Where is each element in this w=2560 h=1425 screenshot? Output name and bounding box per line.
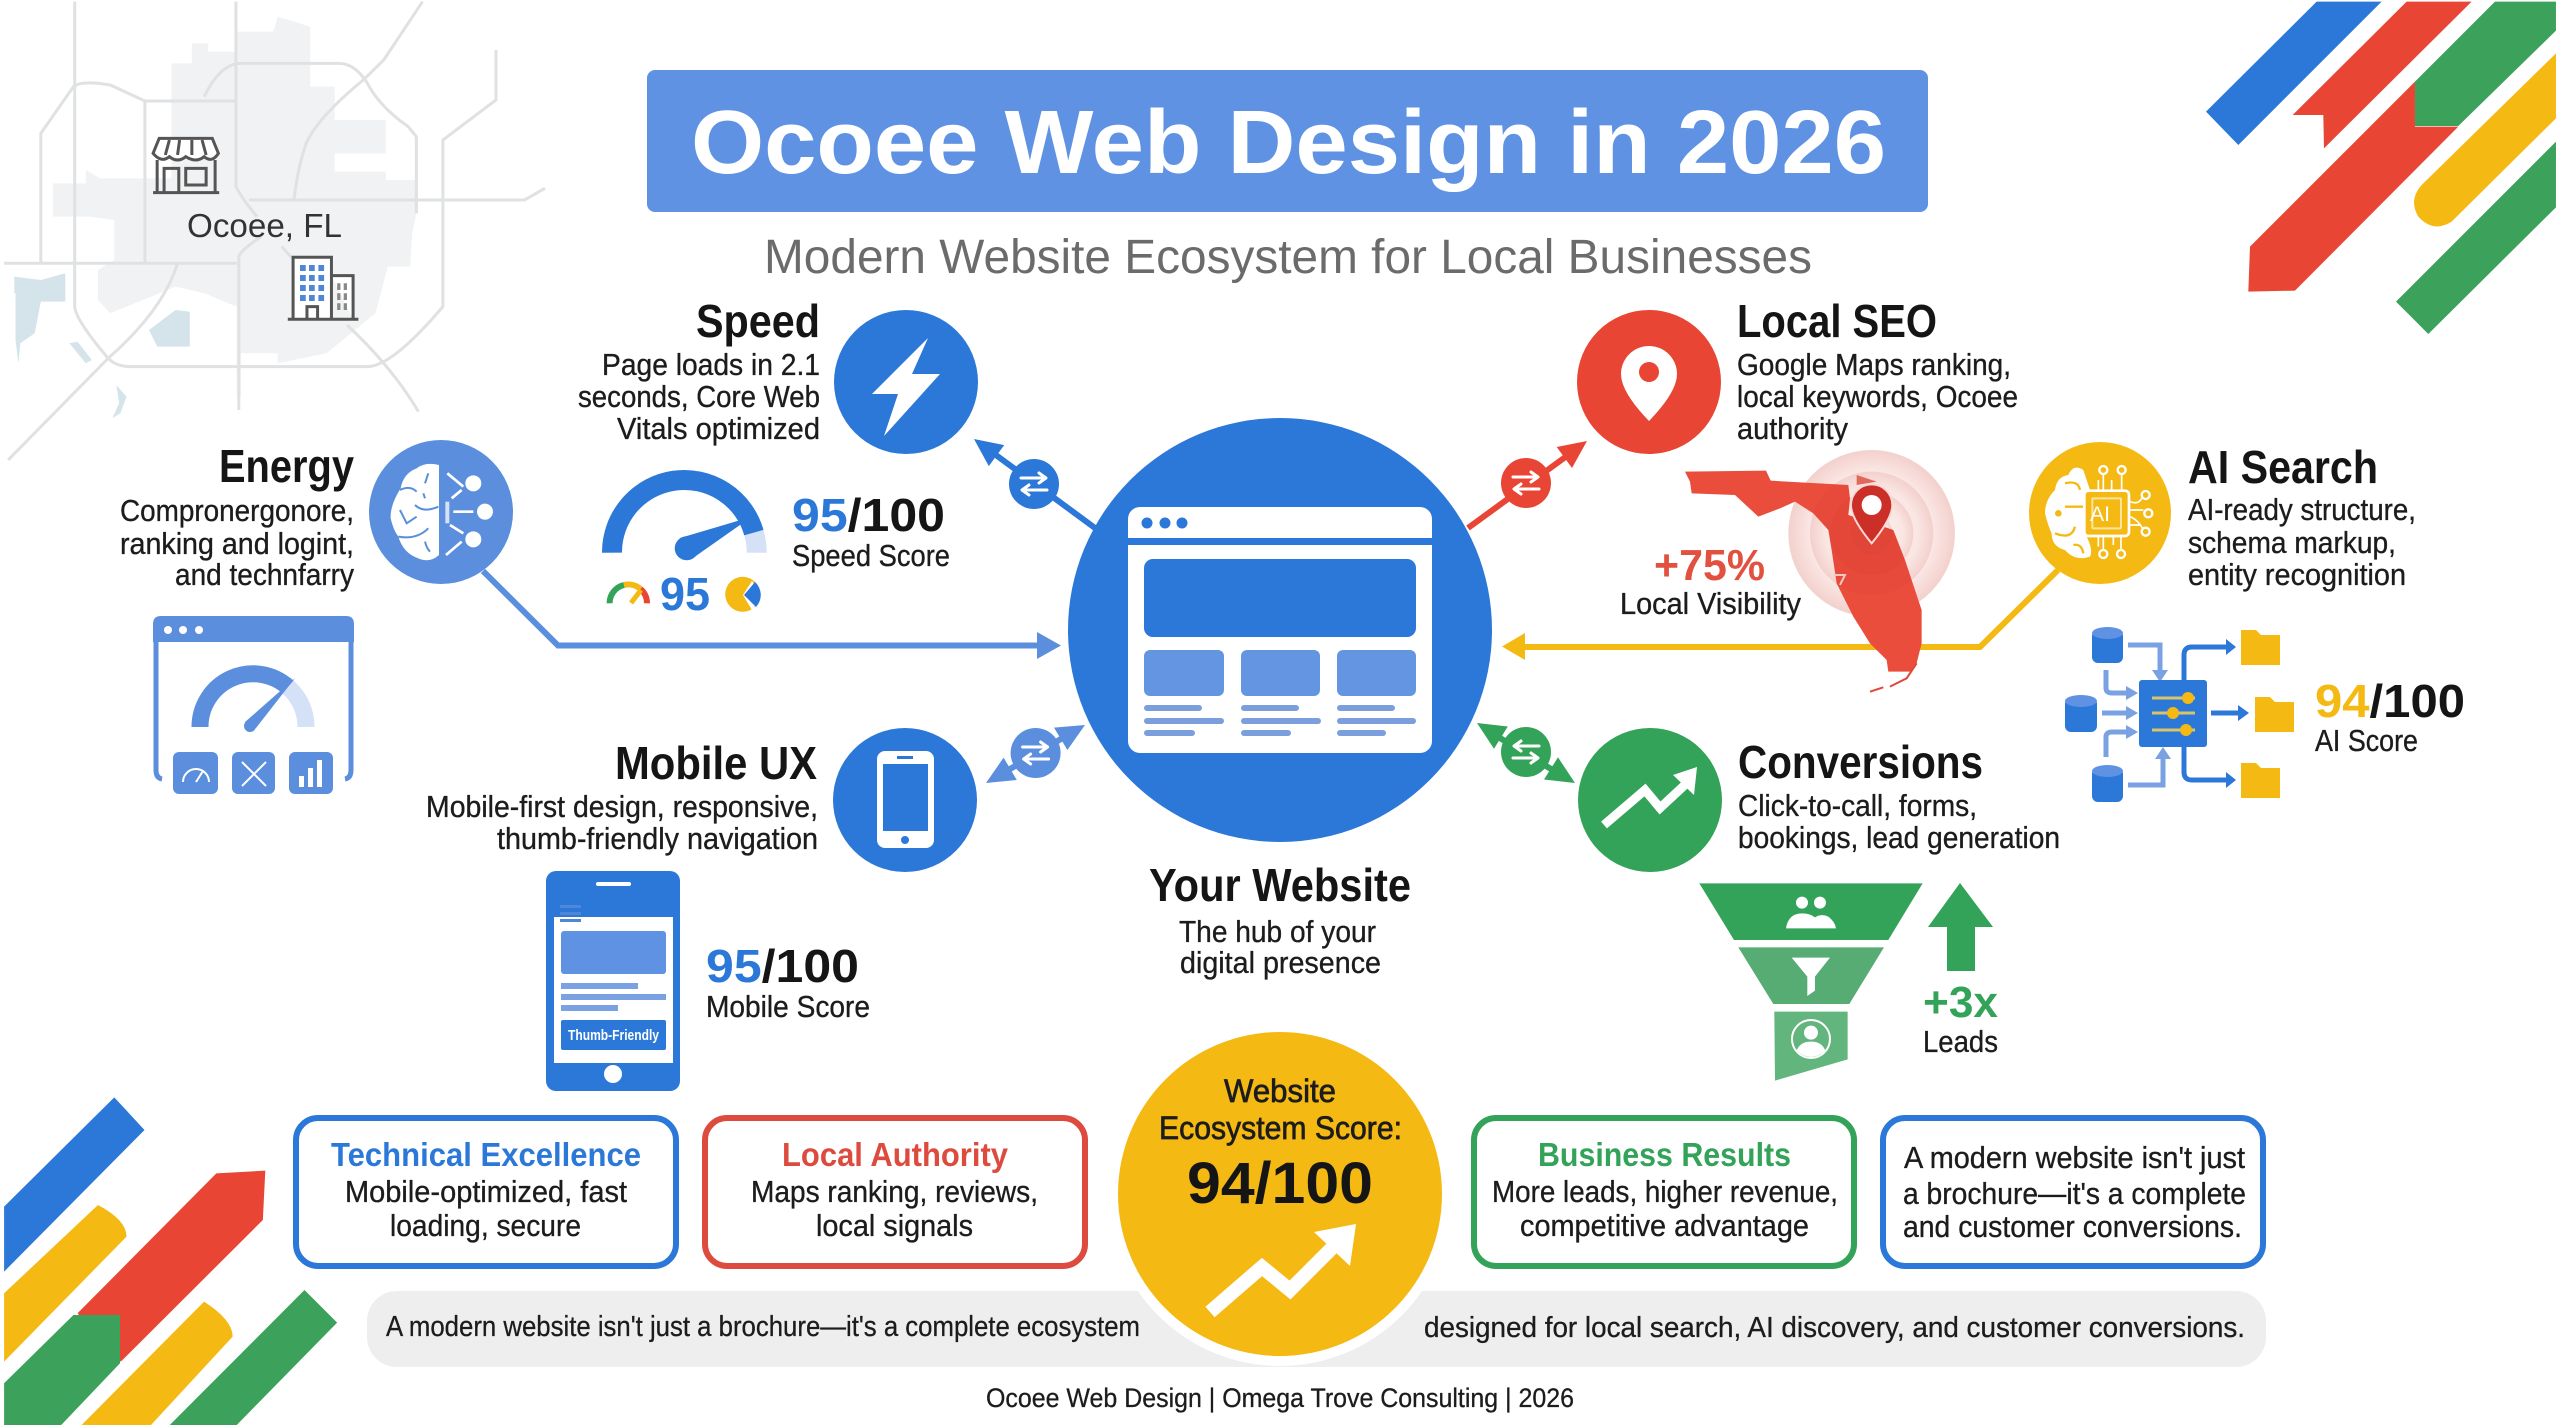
summary strip: A modern website isn't just a brochure—it's a complete ecosystem xyxy=(386,1311,1140,1343)
website ecosystem score badge: Website xyxy=(1224,1073,1336,1109)
conversion funnel xyxy=(1699,883,1923,1081)
energy text: and technfarry xyxy=(175,557,354,592)
speed text: seconds, Core Web xyxy=(578,379,820,414)
icon: AI brain chip: AI xyxy=(2090,503,2110,526)
panel: closing note: A modern website isn't just xyxy=(1904,1140,2245,1175)
summary strip xyxy=(367,1291,2266,1367)
speed gauge: 95 xyxy=(660,568,710,620)
icon: storefront xyxy=(153,138,219,193)
AI search text: AI-ready structure, xyxy=(2188,492,2416,527)
icon: mobile phone xyxy=(833,728,977,872)
icon: energy brain network xyxy=(369,440,513,584)
panel: business results xyxy=(1474,1118,1854,1266)
leads stat xyxy=(1923,883,1999,1059)
icon: browser window xyxy=(1128,507,1432,753)
hub caption: digital presence xyxy=(1180,945,1381,980)
speed score: Speed Score xyxy=(792,538,950,573)
panel: local authority: Local Authority xyxy=(782,1136,1009,1173)
speed score xyxy=(792,489,950,573)
connector: mobile UX xyxy=(986,725,1085,783)
map of Ocoee, FL xyxy=(4,2,545,460)
footer credit: Ocoee Web Design | Omega Trove Consulting | 2026 xyxy=(986,1383,1574,1413)
connector: speed xyxy=(974,439,1095,528)
title banner: Ocoee Web Design in 2026 xyxy=(691,93,1886,193)
leads stat: +3x xyxy=(1923,978,1999,1027)
speed score: 95/100 xyxy=(792,489,945,541)
AI data flow diagram xyxy=(2065,627,2294,802)
local SEO text xyxy=(1737,295,2018,446)
icon: AI brain chip xyxy=(2029,442,2171,584)
icon: score trend arrow xyxy=(1210,1224,1356,1312)
icon: mini gauge xyxy=(610,584,647,603)
energy text: Energy xyxy=(219,440,354,492)
hub caption xyxy=(1149,859,1411,980)
connector: conversions xyxy=(1477,723,1575,783)
mobile score: Mobile Score xyxy=(706,989,870,1024)
AI search text xyxy=(2188,441,2416,592)
panel: technical excellence: Mobile-optimized, fast xyxy=(345,1174,627,1209)
AI score: AI Score xyxy=(2315,723,2418,758)
mobile score: 95/100 xyxy=(706,940,859,992)
energy text: Compronergonore, xyxy=(120,493,354,528)
icon: filter xyxy=(1792,958,1830,996)
leads stat: Leads xyxy=(1923,1024,1998,1059)
connector: local SEO xyxy=(1468,441,1587,528)
Florida map with location pin xyxy=(1685,450,1955,692)
hub: your website circle xyxy=(1068,418,1492,842)
hub caption: The hub of your xyxy=(1179,914,1376,949)
icon: people xyxy=(1786,897,1836,928)
summary strip: designed for local search, AI discovery, and customer conversions. xyxy=(1424,1312,2245,1344)
panel: business results: Business Results xyxy=(1538,1136,1791,1173)
mobile UX text xyxy=(426,737,818,856)
local SEO text: local keywords, Ocoee xyxy=(1737,379,2018,414)
local SEO text: authority xyxy=(1737,411,1848,446)
website ecosystem score badge xyxy=(1108,1022,1452,1366)
panel: closing note: and customer conversions. xyxy=(1903,1209,2242,1244)
panel: technical excellence: loading, secure xyxy=(390,1208,581,1243)
conversions text xyxy=(1738,736,2060,855)
panel: local authority xyxy=(705,1118,1085,1266)
thumb-friendly phone illustration: Thumb-Friendly xyxy=(568,1027,660,1044)
panel: local authority: Maps ranking, reviews, xyxy=(751,1174,1038,1209)
panel: closing note xyxy=(1883,1118,2263,1266)
conversions text: Conversions xyxy=(1738,736,1983,788)
title banner xyxy=(647,70,1928,212)
panel: technical excellence: Technical Excellence xyxy=(331,1136,641,1173)
AI search text: entity recognition xyxy=(2188,557,2406,592)
speed gauge xyxy=(610,480,762,620)
icon: office building xyxy=(288,257,358,319)
icon: local SEO pin xyxy=(1577,310,1721,454)
speed text: Vitals optimized xyxy=(617,411,820,446)
thumb-friendly phone illustration xyxy=(546,871,680,1091)
mobile UX text: Mobile-first design, responsive, xyxy=(426,789,818,824)
arrow: AI search to hub xyxy=(1502,570,2058,660)
decorative stripes: top right xyxy=(2206,2,2556,334)
speed text: Page loads in 2.1 xyxy=(602,347,820,382)
dashboard illustration xyxy=(153,616,354,794)
speed text xyxy=(578,295,820,446)
panel: business results: More leads, higher revenue, xyxy=(1492,1174,1838,1209)
website ecosystem score badge: Ecosystem Score: xyxy=(1159,1110,1402,1146)
panel: business results: competitive advantage xyxy=(1520,1208,1809,1243)
local SEO text: Google Maps ranking, xyxy=(1737,347,2011,382)
panel: closing note: a brochure—it's a complete xyxy=(1903,1176,2246,1211)
website ecosystem score badge: 94/100 xyxy=(1187,1151,1373,1216)
local SEO text: Local SEO xyxy=(1737,295,1937,347)
mobile UX text: thumb-friendly navigation xyxy=(497,821,818,856)
energy text: ranking and logint, xyxy=(120,526,354,561)
AI score xyxy=(2315,675,2465,758)
panel: local authority: local signals xyxy=(816,1208,973,1243)
subtitle: Modern Website Ecosystem for Local Businesses xyxy=(764,231,1812,284)
conversions text: Click-to-call, forms, xyxy=(1738,788,1977,823)
icon: map pin xyxy=(1851,484,1892,543)
AI search text: AI Search xyxy=(2188,441,2378,493)
hub caption: Your Website xyxy=(1149,859,1411,911)
arrow: energy to hub xyxy=(483,571,1061,659)
icon: user badge xyxy=(1792,1020,1830,1058)
mobile score xyxy=(706,940,870,1024)
icon: conversions trend arrow xyxy=(1578,728,1722,872)
mobile UX text: Mobile UX xyxy=(615,737,817,789)
conversions text: bookings, lead generation xyxy=(1738,820,2060,855)
energy text xyxy=(120,440,354,592)
AI search text: schema markup, xyxy=(2188,525,2396,560)
decorative stripes: bottom left xyxy=(4,1097,337,1425)
AI score: 94/100 xyxy=(2315,675,2465,727)
local visibility stat xyxy=(1620,541,1801,621)
local visibility stat: Local Visibility xyxy=(1620,586,1801,621)
icon: speed lightning bolt xyxy=(834,310,978,454)
speed text: Speed xyxy=(696,295,820,347)
panel: technical excellence xyxy=(296,1118,676,1266)
icon: score pie xyxy=(725,577,762,612)
local visibility stat: +75% xyxy=(1654,541,1765,590)
map label: Ocoee, FL xyxy=(187,207,342,244)
